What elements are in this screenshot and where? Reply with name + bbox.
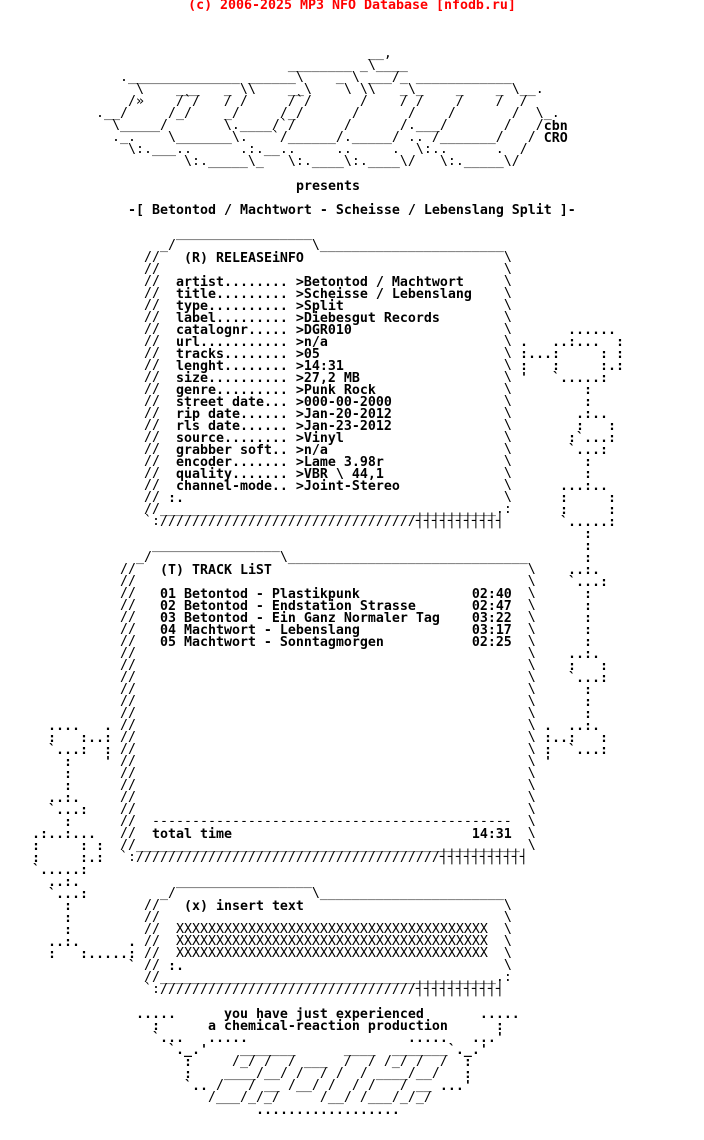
panel: insert text — [144, 874, 512, 997]
presents label: presents — [296, 179, 360, 194]
heading: track list: // (T) TRACK LiST \ — [120, 562, 536, 578]
placeholder text block: // XXXXXXXXXXXXXXXXXXXXXXXXXXXXXXXXXXXXXXX \ // XXXXXXXXXXXXXXXXXXXXXXXXXXXXXXXXXXXXXXX \ // XXXXXXXXXXXXXXXXXXXXXXXXXXXXXXXXXXXXXXX \ — [144, 922, 512, 961]
release heading line: -[ Betontod / Machtwort - Scheisse / Lebenslang Split ]- — [128, 203, 576, 218]
heading: release info: // (R) RELEASEiNFO \ — [144, 250, 512, 266]
footer ascii logo with dotted surround: `... ..... ..... ...' `._.' _______ ____ _______`._.' : /_/ / / ___ / / /_/ / / : : ____/__/ / / / / ____/__/ : `.. / / __ /__/ / / / / __ ...' /___/_/_/ /__/ /___/_/_/ .................. — [152, 1031, 504, 1118]
panel frame top: _________________ _/ \_______________________ — [144, 226, 504, 253]
panel: track list — [120, 538, 536, 865]
release info fields: // artist........ >Betontod / Machtwort \ // title......... >Scheisse / Lebenslang \ // type.......... >Split \ // label......... >Diebesgut Records \ // catalognr..... >DGR010 \ // url........... >n/a \ // tracks........ >05 \ // lenght........ >14:31 \ // size.......... >27,2 MB \ // genre......... >Punk Rock \ // street date... >000-00-2000 \ // rip date...... >Jan-20-2012 \ // rls date...... >Jan-23-2012 \ // source........ >Vinyl \ // grabber soft.. >n/a \ // encoder....... >Lame 3.98r \ // quality....... >VBR \ 44,1 \ // channel-mode.. >Joint-Stereo \ — [144, 274, 512, 494]
panel frame top: _________________ _/ \_______________________ — [144, 874, 504, 901]
dotted chain decoration: left: .... . : :..: `...: : : ' : : ..:. `...: : .:..:... : : : : :.: `.....: ..:. `...: : : : ..:. . : :.....: ` — [32, 719, 136, 974]
panel frame bottom: // :. \ //__________________________________________.: `:////////////////////////////////┤┤┤┤┤┤┤┤┤┤┤ — [144, 490, 512, 529]
panel: release info — [144, 226, 512, 529]
total time: // --------------------------------------------- \ // total time 14:31 \ — [120, 814, 536, 842]
ascii logo with cbn CRO signature: __, ________ _\____ .______________ ______\ _ \ ___/_ ____________ \ ___ _ \\ __\ \ \\ _\_ _ _ \__. /» /`/ / / /`/ / / / / / / .__/ /_/ _/ /_/ / / / / \_. \_____/ \.____/`/ / /.___/ / /cbn ._. \_______\. `/______/._____/ .. /_______/ / CRO \:.___.. .:.__.. .. . \:.. . / \:._____\_ \:.____\:.____\/ \:._____\/ — [96, 46, 568, 169]
heading: insert text: // (x) insert text \ — [144, 898, 512, 914]
blank frame row: // \ — [120, 574, 536, 589]
closing credit text with dotted brackets: ..... you have just experienced ..... : a chemical-reaction production : — [136, 1007, 520, 1034]
panel frame bottom: //________________________________________________ \ `://////////////////////////////////////┤┤┤┤┤┤┤┤┤┤┤ — [120, 838, 536, 865]
panel frame top: ________________ _/ \______________________________ — [120, 538, 528, 565]
dotted chain decoration: right: ...... . ..:... : :...: : : : : :.: ' `.....: : : .:.. : : :`...: `...: : : ...:.. : : : : `.....: : : : ..:. `...: : : : : : ..:. : : `...: : : : . ..:. :..: : : `...: ' — [520, 323, 624, 770]
empty track rows: // \ // \ // \ // \ // \ // \ // \ // \ // \ // \ // \ // \ // \ // \ — [120, 646, 536, 817]
panel frame bottom: // :. \ //__________________________________________.: `:////////////////////////////////┤┤┤┤┤┤┤┤┤┤┤ — [144, 958, 512, 997]
blank frame row: // \ — [144, 910, 512, 925]
footer: closing credits and logo — [136, 1007, 520, 1118]
tracks: // 01 Betontod - Plastikpunk 02:40 \ // 02 Betontod - Endstation Strasse 02:47 \ // 03 Betontod - Ein Ganz Normaler Tag 03:22 \ // 04 Machtwort - Lebenslang 03:17 \ // 05 Machtwort - Sonntagmorgen 02:25 \ — [120, 586, 536, 650]
blank frame row: // \ — [144, 262, 512, 277]
